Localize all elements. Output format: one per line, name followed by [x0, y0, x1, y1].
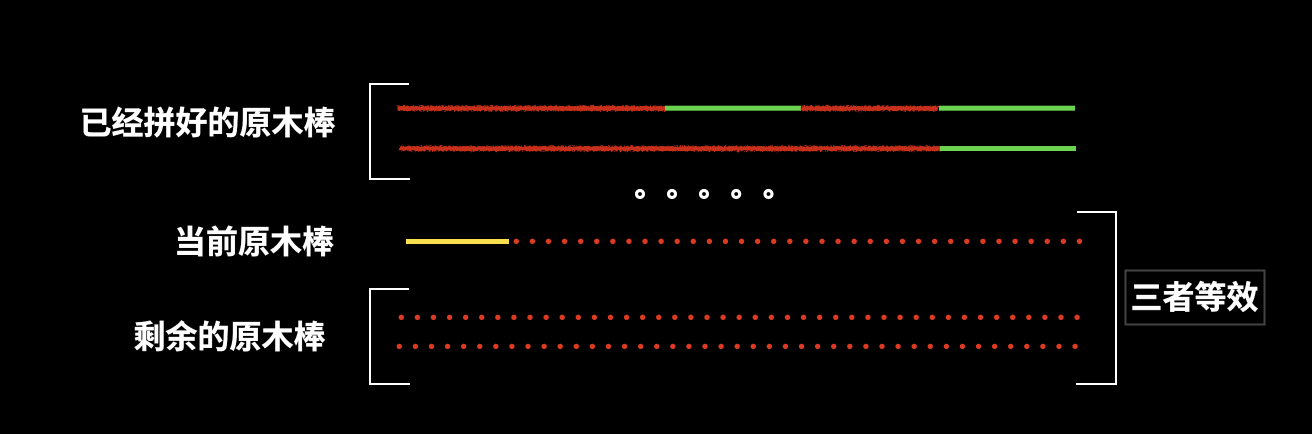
label: remaining logs: 剩余的原木棒 [134, 319, 326, 355]
row 1 green segment b [939, 106, 1075, 111]
current log dots [516, 239, 1080, 244]
bracket: remaining logs [370, 289, 410, 384]
label: current log: 当前原木棒 [174, 224, 334, 260]
row 2 green segment [940, 146, 1076, 151]
log row 1 [398, 106, 1075, 111]
label: finished logs: 已经拼好的原木棒 [80, 105, 336, 141]
equivalence callout [1126, 270, 1264, 324]
bracket: finished logs [370, 84, 410, 179]
ellipsis circles [636, 190, 772, 198]
bracket: right equivalence [1076, 212, 1116, 384]
current log yellow segment [406, 239, 509, 244]
row 1 green segment a [665, 106, 801, 111]
log row 2 [400, 146, 1076, 151]
remaining log dots row 2 [399, 344, 1076, 349]
row 1 red segment a [398, 106, 666, 111]
row 1 red segment b [802, 106, 938, 111]
row 2 red segment [400, 146, 940, 151]
remaining log dots row 1 [401, 315, 1078, 320]
equivalence callout: 三者等效 [1130, 280, 1259, 316]
